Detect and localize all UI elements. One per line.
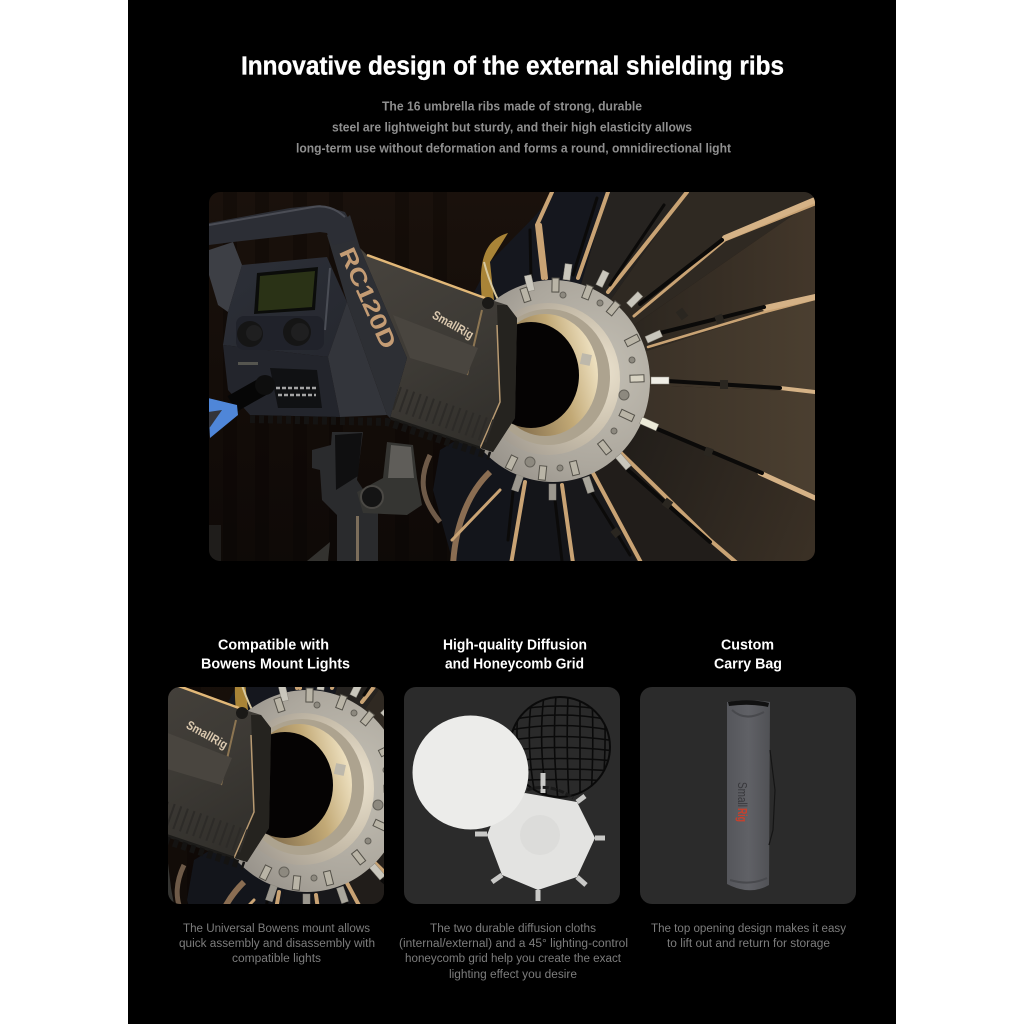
intro text — [296, 100, 732, 156]
intro text: long-term use without deformation and forms a round, omnidirectional light — [296, 142, 732, 156]
background panel — [128, 0, 896, 1024]
column 3 caption — [651, 923, 846, 950]
column 1 caption: quick assembly and disassembly with — [179, 938, 375, 950]
panel: Bowens mount photo — [168, 687, 384, 904]
column 2 caption: (internal/external) and a 45° lighting-control — [399, 938, 628, 950]
bag — [727, 700, 775, 890]
column 3 caption: The top opening design makes it easy — [651, 923, 846, 935]
column 3 heading — [714, 638, 782, 672]
column 1 caption — [179, 923, 375, 965]
column 2 heading: and Honeycomb Grid — [445, 656, 584, 672]
column 2 caption: honeycomb grid help you create the exact — [405, 953, 622, 965]
column 3 caption: to lift out and return for storage — [667, 938, 830, 950]
brand logo: SmallRig — [430, 308, 476, 342]
column 3 heading: Carry Bag — [714, 656, 782, 672]
bag logo: Small — [735, 782, 750, 807]
octagonal diffusion cloth — [475, 773, 605, 901]
brand logo: SmallRig — [184, 718, 230, 752]
title: Innovative design of the external shielding ribs — [241, 52, 784, 80]
intro text: steel are lightweight but sturdy, and their high elasticity allows — [332, 120, 692, 134]
column 3 heading: Custom — [721, 638, 774, 654]
column 2 caption: lighting effect you desire — [449, 969, 577, 981]
panel: carry bag — [640, 687, 856, 904]
column 1 caption: compatible lights — [232, 953, 321, 965]
round diffusion cloth — [412, 716, 528, 830]
column 2 heading: High-quality Diffusion — [443, 638, 587, 654]
column 1 heading: Bowens Mount Lights — [201, 656, 350, 672]
column 1 caption: The Universal Bowens mount allows — [183, 923, 370, 935]
bag logo: Rig — [735, 808, 750, 822]
column 2 heading — [443, 638, 587, 672]
honeycomb grid — [512, 696, 611, 798]
hero photo: light with softbox ribs — [209, 192, 815, 561]
column 2 caption — [399, 923, 628, 981]
model label: RC120D — [334, 243, 402, 353]
intro text: The 16 umbrella ribs made of strong, durable — [382, 100, 642, 114]
column 1 heading: Compatible with — [218, 638, 329, 654]
column 1 heading — [201, 638, 350, 672]
column 2 caption: The two durable diffusion cloths — [430, 923, 596, 935]
panel: diffusion cloths and grid — [404, 687, 620, 904]
